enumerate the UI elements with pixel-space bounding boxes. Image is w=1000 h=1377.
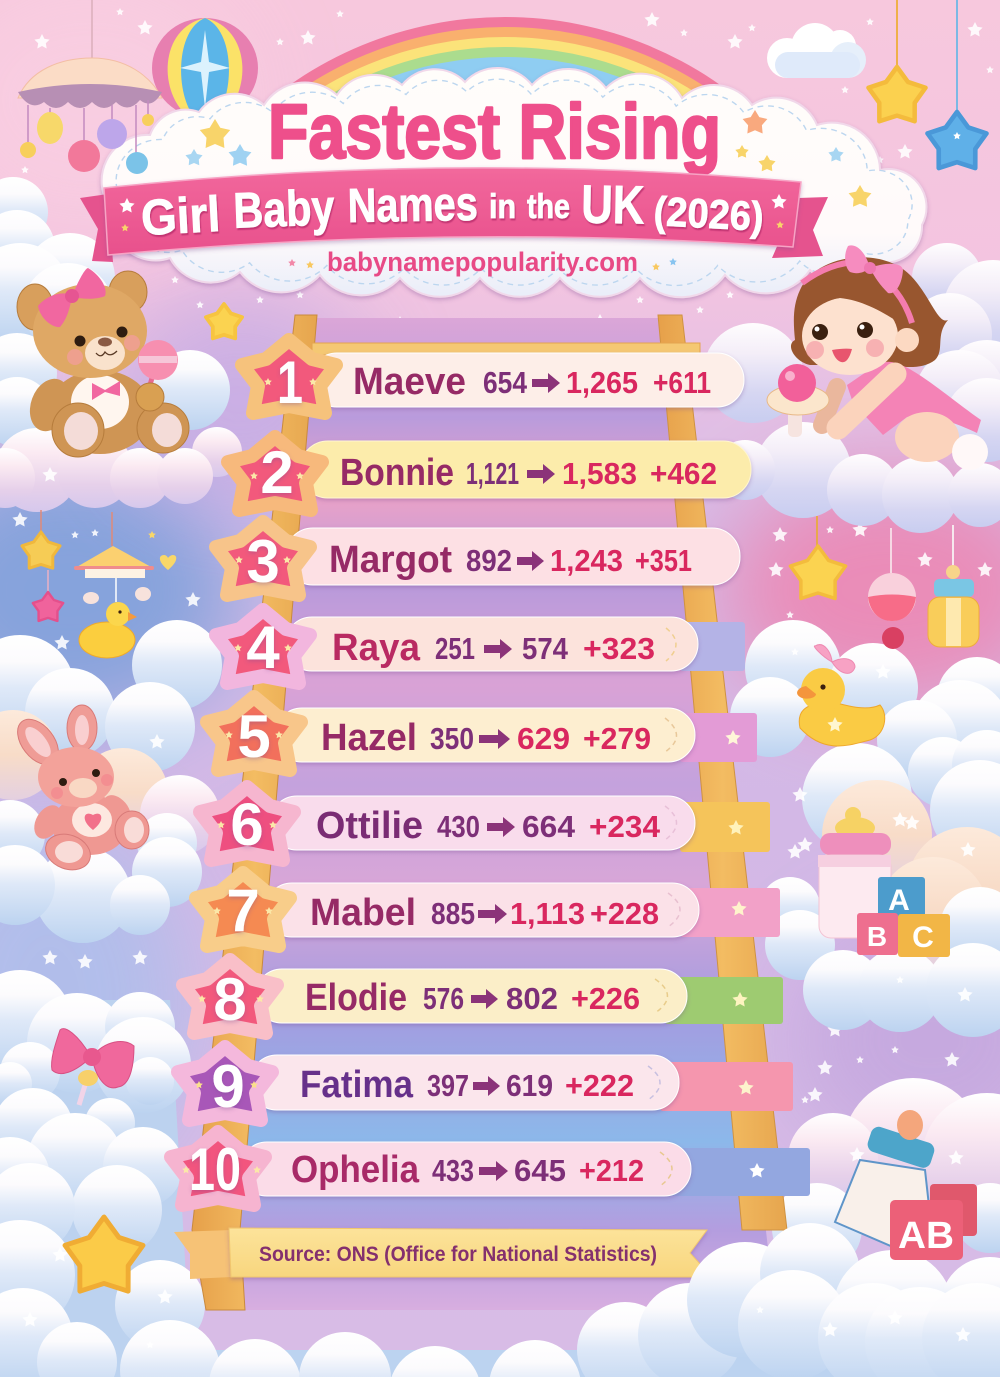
row 6: Ottilie — [270, 796, 695, 850]
rank star 7: 7 — [226, 877, 260, 944]
rung ends — [660, 622, 810, 1196]
clouds: bottom foreground — [0, 1223, 1000, 1377]
clouds: right upper — [703, 243, 1000, 533]
icon: rattle right — [868, 528, 916, 649]
row 9: Fatima — [250, 1055, 679, 1110]
row 5: Hazel: 350 — [430, 721, 474, 756]
ladder background between rails — [220, 318, 775, 1310]
illustration: pink baby bottle with blocks: C — [912, 921, 934, 954]
row 7: Mabel — [265, 883, 699, 937]
illustration: pink bow — [52, 1029, 134, 1105]
row 9: Fatima: Fatima — [300, 1064, 414, 1106]
row 2: Bonnie: +462 — [650, 456, 717, 491]
icon: hanging stars left — [22, 510, 176, 621]
website: babynamepopularity.com — [327, 247, 638, 277]
rank star 6: 6 — [230, 791, 264, 858]
row 8: Elodie: 802 — [506, 981, 558, 1016]
row 1: Maeve: Maeve — [353, 361, 466, 403]
row 8: Elodie — [255, 969, 687, 1023]
illustration: pink bunny — [9, 705, 149, 876]
illustration: teddy bear — [17, 268, 189, 457]
row 8: Elodie: Elodie — [305, 977, 407, 1019]
row 10: Ophelia: Ophelia — [291, 1149, 420, 1191]
stars on clouds — [22, 467, 976, 1348]
row 4: Raya: 574 — [522, 631, 569, 666]
source banner — [174, 1228, 712, 1279]
ribbon subtitle text: the — [527, 188, 570, 226]
illustration: pink baby bottle with blocks — [818, 807, 950, 957]
rainbow — [292, 17, 720, 96]
icon: hot air balloon — [152, 18, 258, 118]
icon: hanging blue star — [928, 0, 986, 168]
icon: small yellow bottle — [928, 525, 979, 647]
rank star 5 — [207, 697, 301, 770]
row 5: Hazel: Hazel — [321, 717, 417, 759]
row 7: Mabel: +228 — [590, 896, 659, 931]
row 4: Raya: +323 — [583, 631, 655, 666]
illustration: tilted bottle with blocks — [835, 1110, 977, 1260]
ladder: left rail — [192, 315, 317, 1310]
row 9: Fatima: +222 — [565, 1068, 634, 1103]
rank star 9 — [178, 1047, 272, 1120]
rank star 3: 3 — [246, 528, 280, 595]
ribbon subtitle text: Girl — [140, 186, 222, 246]
rank star 3 — [216, 522, 310, 595]
rank star 4 — [216, 610, 310, 683]
illustration: pink baby bottle with blocks: B — [867, 921, 887, 952]
row 10: Ophelia: 433 — [432, 1153, 474, 1188]
row 2: Bonnie: 1,121 — [466, 456, 519, 491]
ladder: right rail — [658, 315, 787, 1230]
row 3: Margot — [285, 528, 740, 585]
clouds: left bottom stack — [0, 970, 205, 1377]
row 8: Elodie: +226 — [571, 981, 640, 1016]
title: Fastest Rising: Fastest Rising — [268, 89, 721, 175]
row 1: Maeve: 1,265 — [566, 365, 638, 400]
row 1: Maeve: +611 — [653, 365, 711, 400]
clouds: right warm — [822, 780, 1000, 967]
rank star 6 — [200, 787, 294, 860]
row 4: Raya: Raya — [332, 627, 421, 669]
row 3: Margot: Margot — [329, 539, 452, 581]
row 6: Ottilie: Ottilie — [316, 805, 423, 847]
ribbon subtitle text — [140, 175, 765, 246]
row 4: Raya — [285, 617, 698, 671]
row 2: Bonnie: 1,583 — [562, 456, 637, 491]
row 6: Ottilie: 430 — [437, 809, 480, 844]
row 1: Maeve: 654 — [483, 365, 528, 400]
row 3: Margot: 892 — [466, 543, 512, 578]
row 3: Margot: 1,243 — [550, 543, 623, 578]
source banner: Source: ONS (Office for National Statistics) — [259, 1243, 657, 1266]
rank star 8 — [183, 960, 277, 1033]
rank star 10: 10 — [189, 1136, 241, 1203]
ladder: top rung — [312, 343, 700, 355]
sparkle stars — [12, 8, 994, 1103]
icon: baby mobile — [18, 0, 162, 174]
clouds: left warm — [0, 710, 220, 855]
ribbon banner — [80, 168, 828, 262]
row 7: Mabel: Mabel — [310, 892, 416, 934]
rank star 8: 8 — [213, 966, 247, 1033]
clouds: top left — [0, 177, 230, 447]
row 4: Raya: 251 — [435, 631, 475, 666]
row 6: Ottilie: 664 — [522, 809, 576, 844]
clouds: right lower — [760, 877, 1000, 1037]
illustration: rubber duck left — [79, 578, 137, 658]
clouds: left middle — [0, 620, 222, 772]
ribbon subtitle text: Names — [347, 178, 478, 233]
illustration: big yellow star — [65, 1217, 143, 1291]
row 8: Elodie: 576 — [423, 981, 464, 1016]
row 9: Fatima: 619 — [506, 1068, 553, 1103]
icon: small cloud — [767, 23, 866, 78]
row 2: Bonnie — [300, 441, 751, 498]
row 2: Bonnie: Bonnie — [340, 452, 454, 494]
rank star 2 — [228, 437, 322, 510]
row 6: Ottilie: +234 — [589, 809, 661, 844]
row 10: Ophelia: 645 — [514, 1153, 566, 1188]
row 5: Hazel — [275, 708, 695, 762]
ribbon subtitle text: Baby — [232, 179, 336, 239]
row 5: Hazel: +279 — [583, 721, 651, 756]
clouds: under bear — [0, 427, 242, 512]
row 9: Fatima: 397 — [427, 1068, 469, 1103]
illustration: tilted bottle with blocks: AB — [898, 1215, 954, 1257]
title cloud — [102, 68, 927, 297]
clouds: right middle — [730, 620, 1000, 860]
row 5: Hazel: 629 — [517, 721, 570, 756]
rank star 10 — [171, 1132, 265, 1205]
rank star 1: 1 — [277, 349, 303, 416]
ribbon subtitle text: in — [489, 188, 516, 226]
rank star 4: 4 — [246, 614, 280, 681]
icon: hanging star right — [790, 516, 846, 598]
clouds: left lower — [0, 800, 202, 943]
illustration: pink baby bottle with blocks: A — [888, 884, 910, 917]
icon: hanging gold star — [868, 0, 926, 121]
row 10: Ophelia — [240, 1142, 691, 1196]
ribbon subtitle text: (2026) — [653, 188, 765, 240]
rank star 5: 5 — [237, 703, 271, 770]
icon: yellow star near bear — [206, 304, 242, 338]
row 1: Maeve — [310, 353, 744, 407]
illustration: baby girl — [767, 245, 988, 470]
ribbon subtitle text: UK — [581, 175, 645, 236]
row 3: Margot: +351 — [635, 543, 692, 578]
title stars — [185, 110, 871, 207]
rank star 1 — [242, 340, 336, 416]
row 7: Mabel: 885 — [431, 896, 475, 931]
row 7: Mabel: 1,113 — [510, 896, 585, 931]
rank star 9: 9 — [211, 1053, 245, 1120]
rank star 7 — [196, 873, 290, 946]
clouds: right bottom back — [772, 1078, 1000, 1273]
rank star 2: 2 — [260, 439, 294, 506]
row 10: Ophelia: +212 — [579, 1153, 644, 1188]
illustration: rubber duck right — [797, 645, 885, 746]
